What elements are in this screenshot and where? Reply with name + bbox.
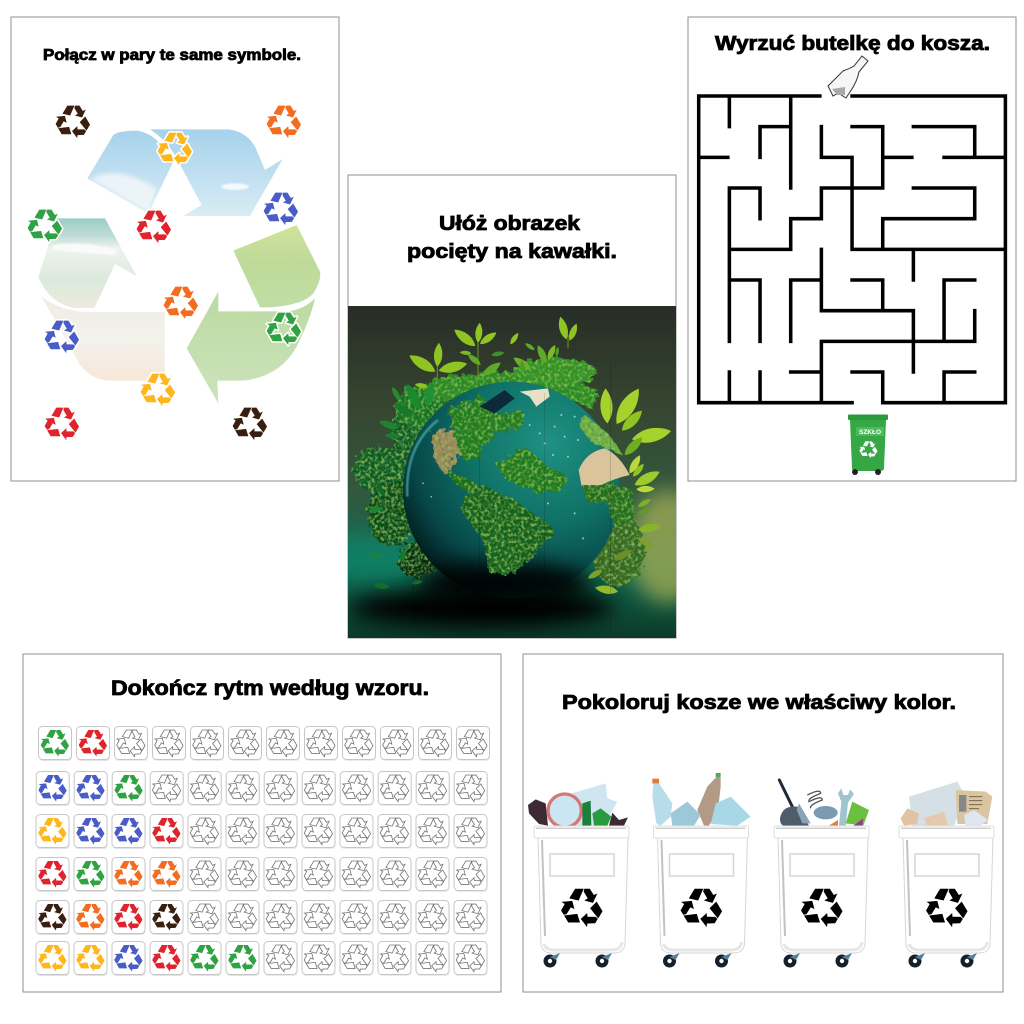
continents [432, 395, 635, 573]
bin: plastic waste [652, 773, 751, 968]
tile row 6 [36, 942, 487, 976]
dark sea patch [480, 390, 515, 413]
icon: broken bottle [828, 56, 868, 98]
panel: colour the bins [523, 654, 1003, 992]
panel: match the symbols [11, 17, 339, 481]
fragment: sky [87, 129, 283, 216]
title: match pairs: Połącz w pary te same symbole. [43, 47, 301, 64]
bin: paper waste [899, 782, 994, 968]
maze walls [699, 96, 1005, 403]
matching icons [24, 106, 303, 442]
panel: puzzle [348, 174, 676, 638]
fragment: sand [42, 297, 165, 381]
panel: finish the rhythm [23, 654, 501, 992]
foliage behind the globe [353, 358, 645, 587]
picture: green globe [348, 306, 676, 638]
water droplets [422, 414, 584, 539]
sand on Africa [579, 448, 630, 485]
tile row 5 [36, 900, 487, 935]
panel: maze [688, 17, 1016, 481]
bin: glass waste [528, 783, 629, 968]
globe [403, 382, 620, 598]
puzzle seams [414, 363, 610, 633]
title: rhythm: Dokończ rytm według wzoru. [111, 676, 429, 700]
tile row 1 [38, 726, 490, 761]
icon: green glass bin: SZKŁO [859, 429, 881, 436]
title: puzzle second line: pocięty na kawałki. [407, 240, 617, 263]
leaf sprigs [368, 316, 673, 596]
bin: metal waste [774, 780, 869, 968]
fragment: grass top [233, 225, 320, 307]
tile row 2 [36, 772, 488, 806]
icon: green glass bin [848, 414, 888, 475]
fragment: sea [38, 218, 137, 308]
ice fragment [520, 388, 550, 407]
title: colour the bins: Pokoloruj kosze we właściwy kolor. [562, 691, 956, 714]
recycling symbol made of photo fragments [38, 129, 320, 403]
title: maze: Wyrzuć butelkę do kosza. [715, 32, 990, 55]
tile row 3 [36, 814, 487, 849]
fragment: grass bottom [187, 292, 315, 403]
tile row 4 [36, 858, 487, 892]
title: puzzle: Ułóż obrazek [439, 212, 581, 235]
